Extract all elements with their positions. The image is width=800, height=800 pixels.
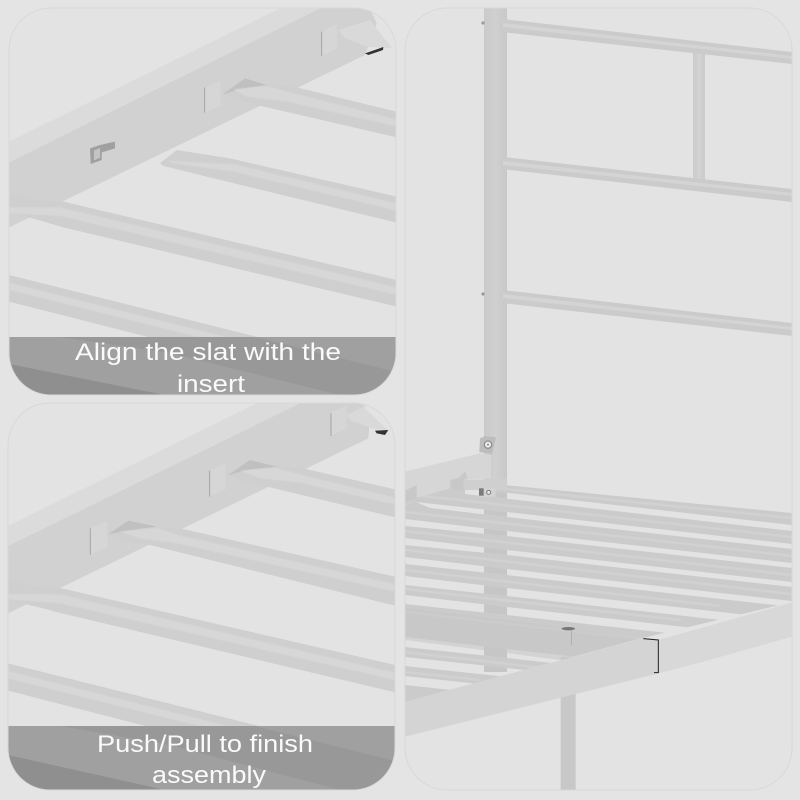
empty slot in rail <box>90 142 115 164</box>
panel: bed frame overview <box>405 8 792 790</box>
insert bracket upper <box>330 413 332 436</box>
back rail <box>405 453 491 507</box>
caption: push/pull <box>97 731 313 789</box>
slat C <box>26 588 394 692</box>
slat, lower inserted <box>107 521 395 606</box>
caption band <box>9 337 396 395</box>
caption: align the slat: insert <box>177 371 245 398</box>
first slat end <box>464 480 484 490</box>
headboard post <box>484 8 507 488</box>
rail joint gap <box>643 639 658 673</box>
caption: push/pull: Push/Pull to finish <box>97 731 313 758</box>
lower bracket with bolt <box>479 488 496 497</box>
front side rail sleeve <box>658 602 792 673</box>
slat highlights <box>639 638 642 640</box>
panel outline <box>405 8 792 790</box>
bed frame rail top face <box>8 403 300 546</box>
bed frame rail side face <box>8 403 370 613</box>
slat D <box>8 664 258 726</box>
leg <box>561 657 576 790</box>
panel: push/pull to finish assembly <box>8 403 395 790</box>
slat deck <box>406 480 792 702</box>
bed frame rail top face <box>9 8 320 162</box>
slat B, free end <box>160 150 397 223</box>
under-frame shadow band <box>406 637 572 660</box>
headboard rail lower <box>500 290 792 336</box>
insert bracket middle <box>204 87 206 113</box>
bed frame rail side face <box>9 8 377 227</box>
insert bracket upper <box>321 32 322 56</box>
rail insert clips <box>405 471 468 505</box>
panel outline <box>9 8 396 395</box>
panel outline <box>8 403 395 790</box>
slat C <box>30 202 396 306</box>
post seen through gaps <box>484 492 507 672</box>
slat A, inserted <box>221 78 397 137</box>
slat gaps <box>406 490 792 690</box>
headboard rail middle <box>500 157 792 202</box>
center support bolt <box>562 627 575 645</box>
caption band <box>8 726 395 790</box>
front side rail <box>405 638 658 737</box>
headboard vertical bar <box>693 52 705 182</box>
post screws <box>481 21 485 296</box>
caption: push/pull: assembly <box>152 762 266 789</box>
insert bracket middle <box>209 470 210 497</box>
upper bracket with bolt <box>479 436 496 454</box>
top right slat end <box>365 28 392 55</box>
slat, upper inserted <box>227 460 395 517</box>
panel: align the slat with the insert <box>9 8 397 400</box>
top right slat end <box>366 410 388 435</box>
caption: align the slat: Align the slat with the <box>75 339 341 366</box>
headboard rail top <box>500 19 792 64</box>
caption: align the slat <box>75 339 341 398</box>
slat D <box>10 275 256 337</box>
insert bracket lower <box>90 528 91 555</box>
